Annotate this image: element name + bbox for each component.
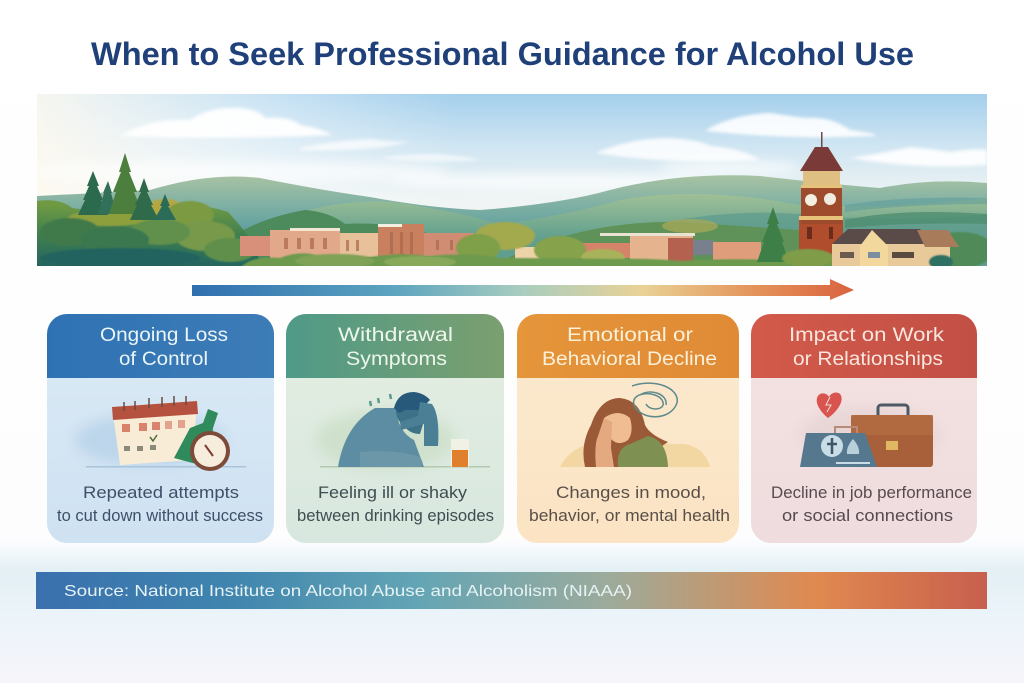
distant hills (37, 175, 987, 266)
heading: Withdrawal (338, 325, 453, 346)
pine tree beside tower (757, 207, 789, 262)
icon: person with head in hand and drink (315, 392, 490, 470)
description: between drinking episodes (297, 506, 494, 525)
heading: Behavioral Decline (542, 349, 717, 370)
college building centre (515, 233, 761, 262)
bushes at tower foot (782, 249, 834, 267)
description (530, 486, 729, 524)
heading band (286, 314, 504, 378)
heading: Emotional or (567, 325, 694, 346)
description: to cut down without success (57, 506, 263, 525)
panel: ongoing loss of control (47, 314, 274, 543)
description: or social connections (782, 506, 953, 525)
panel: impact on work or relationships (751, 314, 977, 543)
icon: broken heart, medical bag and briefcase (800, 393, 940, 467)
description (772, 486, 972, 521)
description: behavior, or mental health (529, 506, 730, 525)
title: When to Seek Professional Guidance for Alcohol Use (91, 36, 914, 72)
heading band (47, 314, 274, 378)
heading: Impact on Work (789, 325, 945, 346)
panel: withdrawal symptoms (286, 314, 504, 543)
progress arrow (192, 279, 854, 300)
description: Repeated attempts (83, 483, 239, 502)
heading: or Relationships (793, 349, 943, 370)
clock tower (799, 132, 843, 254)
heading: Ongoing Loss (100, 325, 228, 346)
description: Decline in job performance (771, 483, 972, 502)
heading band (751, 314, 977, 378)
description: Changes in mood, (556, 483, 706, 502)
heading band (517, 314, 739, 378)
foreground foliage left (37, 199, 262, 268)
description (57, 486, 262, 521)
icon: distressed woman with scribble (560, 383, 710, 467)
pine trees left (78, 153, 176, 220)
description (297, 483, 494, 525)
heading (789, 325, 945, 370)
panel: campus landscape banner (30, 94, 994, 270)
college building left (240, 224, 474, 260)
foreground bushes (241, 232, 987, 266)
heading (544, 327, 716, 365)
right-of-centre trees (455, 221, 626, 260)
house right of tower (832, 229, 959, 266)
description: Feeling ill or shaky (318, 483, 468, 502)
bush right (929, 255, 953, 269)
icon: calendar, bottle and clock (75, 396, 246, 471)
source bar (36, 572, 987, 609)
source text: Source: National Institute on Alcohol Abuse and Alcoholism (NIAAA) (64, 583, 632, 600)
panel: emotional or behavioral decline (517, 314, 739, 543)
heading: Symptoms (346, 349, 447, 370)
heading: of Control (119, 349, 208, 370)
heading (101, 327, 228, 365)
heading (338, 325, 453, 370)
